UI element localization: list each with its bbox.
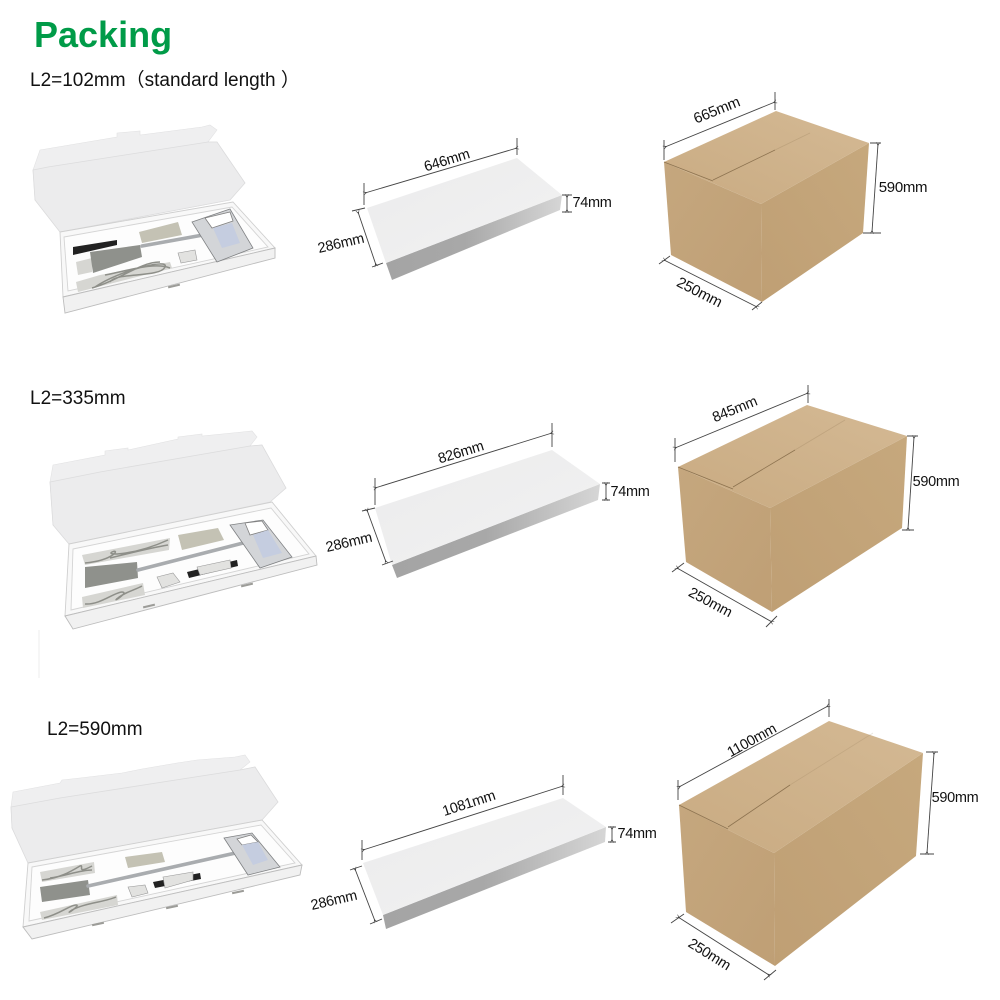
title: Packing — [34, 14, 172, 55]
dimension 250mm: 250mm — [686, 585, 735, 621]
dimension 845mm: 845mm — [710, 394, 760, 426]
dimension 286mm: 286mm — [309, 888, 359, 914]
dimension 646mm — [364, 138, 517, 205]
dimension 286mm: 286mm — [324, 530, 374, 556]
dimension 665mm: 665mm — [691, 94, 742, 127]
dimension 74mm: 74mm — [572, 195, 612, 211]
heading: L2=590mm: L2=590mm — [47, 719, 143, 740]
dimension 646mm: 646mm — [422, 146, 472, 175]
dimension 1100mm — [678, 699, 829, 800]
heading: L2=335mm: L2=335mm — [30, 388, 126, 409]
dimension 286mm — [324, 508, 393, 565]
dimension 250mm: 250mm — [685, 936, 733, 974]
dimension 590mm — [863, 143, 927, 233]
dimension 1081mm — [362, 775, 563, 860]
dimension 286mm: 286mm — [316, 231, 366, 257]
dimension 590mm: 590mm — [913, 474, 960, 490]
dimension 286mm — [316, 208, 383, 267]
open box photo, L2=335mm — [50, 431, 317, 629]
dimension 250mm — [659, 256, 762, 311]
dimension 665mm — [664, 92, 775, 160]
open box photo, L2=102mm — [33, 125, 275, 313]
open box photo, L2=590mm — [11, 755, 302, 939]
dimension 286mm — [309, 866, 382, 924]
heading: L2=102mm: L2=102mm（standard length ） — [30, 69, 300, 91]
cardboard box, 845mm — [672, 385, 960, 627]
dimension 826mm: 826mm — [436, 438, 486, 467]
dimension 826mm — [375, 423, 552, 505]
dimension 590mm — [920, 752, 979, 854]
dimension 1081mm: 1081mm — [440, 788, 498, 820]
dimension 590mm — [902, 436, 960, 530]
faint vertical line — [38, 630, 40, 678]
dimension 250mm: 250mm — [674, 274, 725, 311]
dimension 74mm: 74mm — [617, 826, 657, 842]
dimension 845mm — [675, 385, 808, 462]
flat box, 646mm — [316, 138, 612, 280]
cardboard box, 665mm — [659, 92, 927, 311]
dimension 74mm: 74mm — [610, 484, 650, 500]
flat box, 1081mm — [309, 775, 657, 929]
dimension 1100mm: 1100mm — [725, 721, 779, 761]
flat box, 826mm — [324, 423, 650, 578]
dimension 590mm: 590mm — [879, 179, 927, 196]
dimension 590mm: 590mm — [932, 790, 979, 806]
cardboard box, 1100mm — [671, 699, 979, 980]
dimension 250mm — [671, 914, 776, 980]
dimension 250mm — [672, 563, 777, 627]
